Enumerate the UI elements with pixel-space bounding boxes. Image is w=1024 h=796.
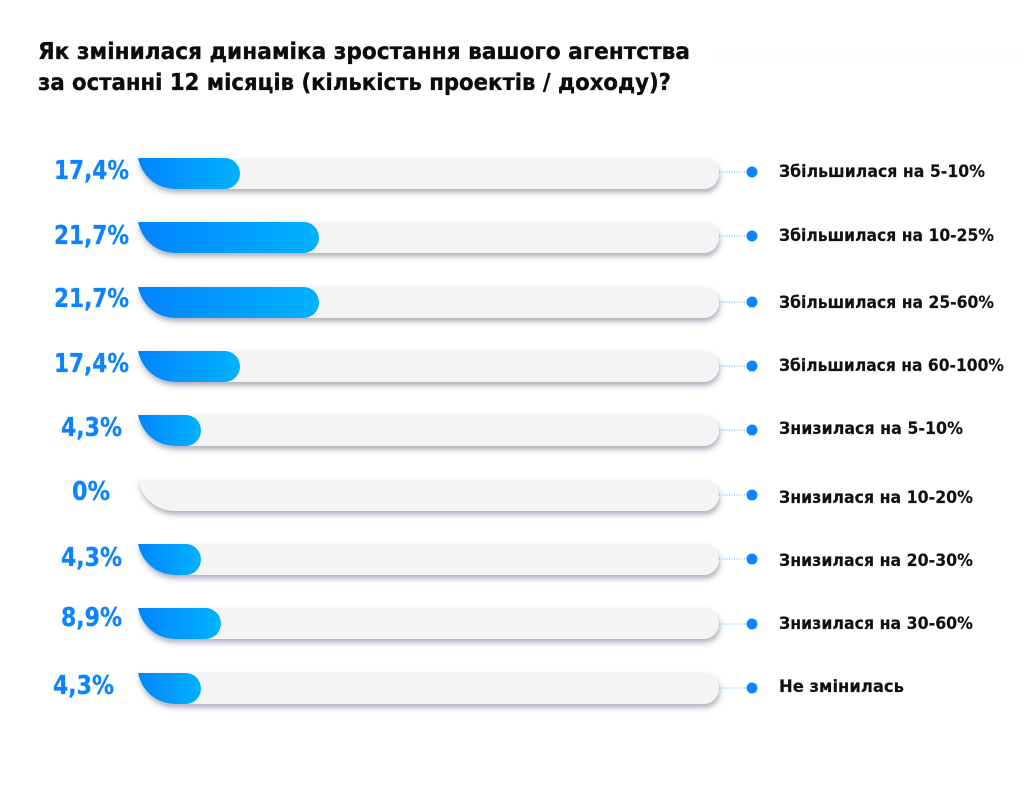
row: Збільшилася на 5-10% (54, 156, 985, 189)
title (38, 39, 690, 96)
row: Не змінилась: Не змінилась (779, 677, 904, 696)
row: Знизилася на 10-20%: 0% (72, 477, 110, 507)
row: Знизилася на 30-60% (61, 603, 973, 639)
row: Знизилася на 30-60%: 8,9% (61, 603, 122, 633)
row: Збільшилася на 25-60%: Збільшилася на 25-60% (779, 293, 994, 312)
row: Збільшилася на 10-25%: Збільшилася на 10-25% (779, 226, 994, 245)
row: Знизилася на 30-60%: Знизилася на 30-60% (779, 614, 973, 633)
row: Знизилася на 5-10% (61, 413, 963, 446)
row: Збільшилася на 5-10%: Збільшилася на 5-10% (779, 162, 985, 181)
title: за останні 12 місяців (кількість проектів / доходу)? (38, 70, 671, 96)
row: Збільшилася на 25-60%: 21,7% (54, 284, 129, 314)
row: Знизилася на 20-30%: Знизилася на 20-30% (779, 551, 973, 570)
row: Збільшилася на 10-25%: 21,7% (54, 221, 129, 251)
row: Збільшилася на 60-100%: 17,4% (54, 349, 129, 379)
row: Збільшилася на 60-100% (54, 349, 1004, 382)
row: Знизилася на 10-20% (72, 477, 973, 511)
row: Знизилася на 5-10%: 4,3% (61, 413, 122, 443)
row: Знизилася на 5-10%: Знизилася на 5-10% (779, 419, 963, 438)
row: Збільшилася на 10-25% (54, 221, 994, 253)
row: Не змінилась (53, 671, 904, 704)
row: Знизилася на 20-30% (61, 543, 973, 575)
row: Збільшилася на 60-100%: Збільшилася на 60-100% (779, 356, 1004, 375)
title: Як змінилася динаміка зростання вашого агентства (38, 39, 690, 65)
row: Знизилася на 20-30%: 4,3% (61, 543, 122, 573)
row: Не змінилась: 4,3% (53, 671, 114, 701)
row: Збільшилася на 5-10%: 17,4% (54, 156, 129, 186)
row: Збільшилася на 25-60% (54, 284, 994, 318)
row: Знизилася на 10-20%: Знизилася на 10-20% (779, 488, 973, 507)
